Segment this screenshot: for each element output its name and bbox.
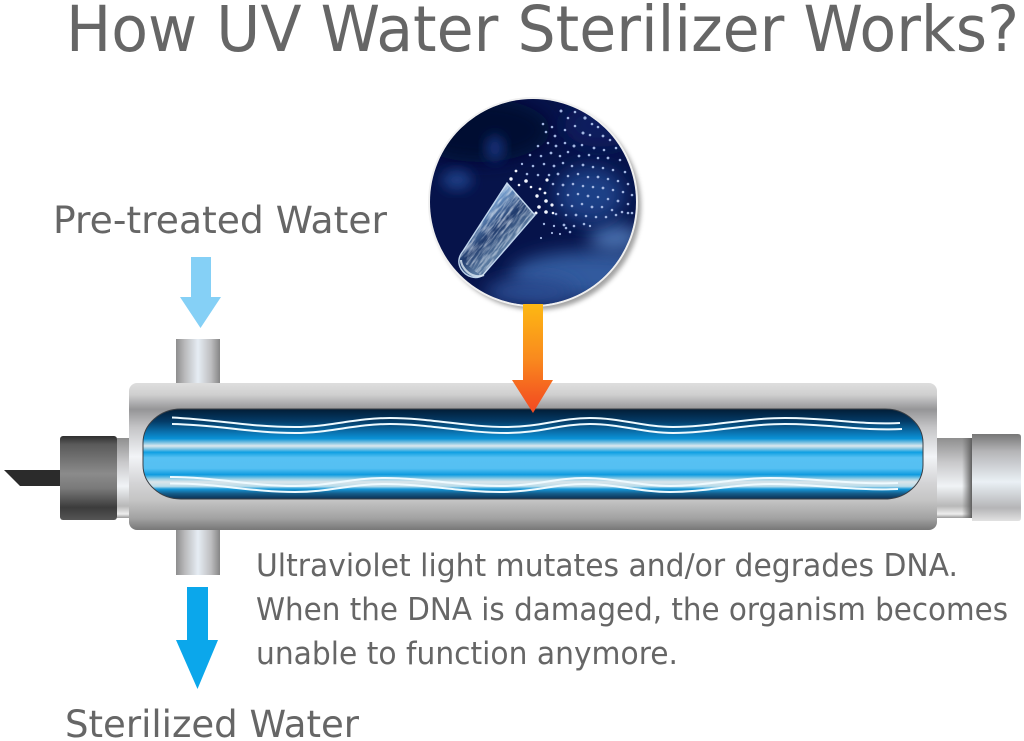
- particles: [521, 110, 633, 239]
- right collar: [936, 438, 972, 518]
- left connector cap: [60, 436, 117, 520]
- icon: UV destroying bacterium: [428, 97, 644, 313]
- water tube with UV lamp: [143, 409, 923, 499]
- explanation text: [256, 548, 1008, 672]
- right connector cap: [972, 434, 1021, 521]
- explanation text: Ultraviolet light mutates and/or degrades DNA.: [256, 548, 958, 584]
- arrow: UV light: [512, 304, 553, 413]
- pipe: outlet: [176, 530, 220, 575]
- arrow: water in: [180, 257, 221, 328]
- left collar: [117, 438, 130, 518]
- label: pre-treated water: Pre-treated Water: [53, 199, 388, 242]
- arrow: water out: [176, 587, 218, 689]
- power cable: [4, 470, 60, 486]
- flow lines: [170, 418, 902, 492]
- sterilizer chamber: [129, 383, 937, 530]
- explanation text: unable to function anymore.: [256, 636, 678, 672]
- pipe: inlet: [176, 339, 220, 384]
- bacterium: [458, 182, 536, 278]
